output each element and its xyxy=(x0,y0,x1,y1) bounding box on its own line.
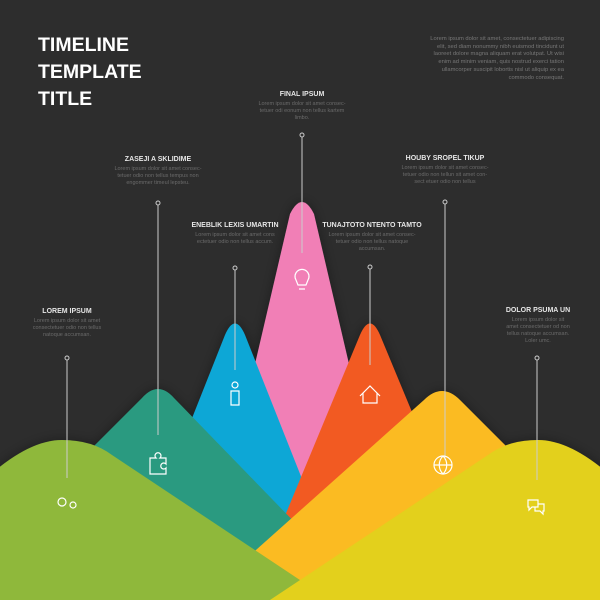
line markers xyxy=(66,360,68,478)
label: lorem ipsum xyxy=(33,308,101,338)
title: TEMPLATE xyxy=(38,61,142,83)
label: eneblik xyxy=(191,222,279,245)
label: final ipsum xyxy=(258,91,346,121)
mountain: teal xyxy=(0,389,370,600)
label: final ipsum: FINAL IPSUM xyxy=(280,91,324,98)
mountain: green xyxy=(0,440,330,600)
label: houby: Lorem ipsum dolor sit amet consec-tetuer odio non tellun sit amet con-sect etuer odio non tellus xyxy=(401,165,489,185)
mountain: blue xyxy=(120,324,350,600)
label: eneblik: ENEBLIK LEXIS UMARTIN xyxy=(191,222,279,229)
title: TIMELINE xyxy=(38,34,129,56)
label: tunajtoto xyxy=(322,222,422,252)
label: tunajtoto: Lorem ipsum dolor sit amet consec-tetuer odio non tellus natoque accumsan. xyxy=(328,232,416,252)
label: lorem ipsum: Lorem ipsum dolor sit amet consectetuer odio non tellus natoque accumsan. xyxy=(33,318,101,338)
label: eneblik: Lorem ipsum dolor sit amet cons ectetuer odio non tellus accum. xyxy=(195,232,275,245)
mountain: pink xyxy=(200,202,404,600)
label: final ipsum: Lorem ipsum dolor sit amet consec-tetuer odi eonum non tellus kartem limbo. xyxy=(258,101,346,121)
label: lorem ipsum: LOREM IPSUM xyxy=(42,308,92,315)
title: TITLE xyxy=(38,88,92,110)
intro text: Lorem ipsum dolor sit amet, consectetuer adipiscing elit, sed diam nonummy nibh euismod tincidunt ut laoreet dolore magna aliquam erat volutpat. Ut wisi enim ad minim veniam, quis nostrud exerci tation ullamcorper suscipit lobortis nisl ut aliquip ex ea commodo consequat. xyxy=(430,36,564,81)
label: dolor psuma: Lorem ipsum dolor sit amet consectetuer od non tellus natoque accumsan. Loler umc. xyxy=(506,317,570,344)
label: zaseji: ZASEJI A SKLIDIME xyxy=(125,156,191,163)
icons xyxy=(58,269,544,514)
label: houby xyxy=(401,155,489,185)
title xyxy=(38,34,142,110)
mountain: yellow xyxy=(270,440,600,600)
label: zaseji: Lorem ipsum dolor sit amet consec-tetuer odio non tellus tempus non engommer timeul lepsteu. xyxy=(114,166,202,186)
mountain: amber xyxy=(200,391,600,600)
label: tunajtoto: TUNAJTOTO NTENTO TAMTO xyxy=(322,222,422,229)
label: houby: HOUBY SROPEL TIKUP xyxy=(406,155,484,162)
mountain: orange xyxy=(250,324,490,600)
label: dolor psuma: DOLOR PSUMA UN xyxy=(506,307,570,314)
label: zaseji xyxy=(114,156,202,186)
